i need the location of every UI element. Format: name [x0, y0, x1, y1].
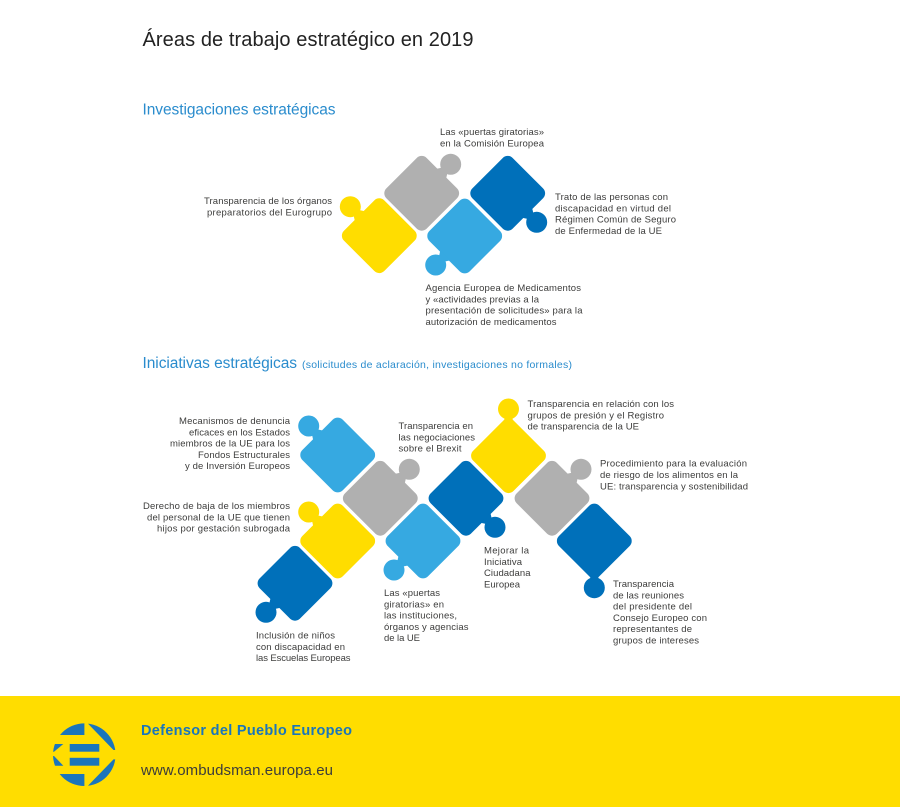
label: negociaciones Brexit: sobre el Brexit: [398, 444, 462, 455]
label: derecho de baja: hijos por gestación subrogada: [157, 524, 291, 535]
footer band: [0, 696, 900, 807]
label: trato de las personas: Trato de las personas con: [555, 192, 668, 203]
label: Agencia Europea de Medicamentos: Agencia Europea de Medicamentos: [426, 283, 581, 294]
icon: ombudsman logo: [53, 723, 116, 786]
puzzle piece: dark blue 2: [426, 458, 523, 555]
label: evaluación de riesgo: de riesgo de los alimentos en la: [600, 470, 739, 481]
label: Escuelas Europeas: las Escuelas Europeas: [256, 653, 351, 664]
label: puertas giratorias instituciones: [384, 588, 469, 644]
label: mecanismos de denuncia: y de Inversión Europeos: [185, 461, 290, 472]
puzzle piece: gray 1: [340, 442, 437, 539]
label: mecanismos de denuncia: miembros de la UE para los: [170, 439, 290, 450]
label: presidente del Consejo: Transparencia: [613, 579, 675, 590]
label: órganos preparatorios: preparatorios del Eurogrupo: [207, 207, 332, 218]
label: grupos de presión: Transparencia en relación con los: [528, 399, 674, 410]
puzzle piece: yellow 1: [281, 484, 378, 581]
puzzle piece: yellow: [323, 179, 420, 276]
label: evaluación de riesgo: [600, 459, 748, 492]
label: órganos preparatorios: Transparencia de los órganos: [204, 196, 332, 207]
puzzle piece: gray 2: [512, 442, 609, 539]
footer name: Defensor del Pueblo Europeo: [141, 723, 352, 739]
label: puertas giratorias instituciones: de la UE: [384, 633, 420, 644]
label: mecanismos de denuncia: [170, 416, 291, 472]
label: puertas giratorias Comisión: en la Comisión Europea: [440, 138, 545, 149]
label: puertas giratorias Comisión: [440, 127, 545, 149]
puzzle: iniciativas estratégicas: [238, 398, 635, 640]
label: negociaciones Brexit: [398, 421, 475, 455]
label: puertas giratorias Comisión: Las «puertas giratorias»: [440, 127, 544, 138]
footer url: www.ombudsman.europa.eu: [140, 762, 333, 779]
label: Escuelas Europeas: Inclusión de niños: [256, 630, 335, 642]
label: Iniciativa Ciudadana: Europea: [484, 579, 521, 590]
label: derecho de baja: [143, 501, 291, 535]
puzzle piece: yellow 2: [468, 398, 549, 496]
label: Iniciativa Ciudadana: [484, 546, 531, 590]
label: puertas giratorias instituciones: órganos y agencias: [384, 622, 469, 633]
label: órganos preparatorios: [204, 196, 332, 218]
label: Iniciativa Ciudadana: Mejorar la: [484, 546, 530, 556]
label: Agencia Europea de Medicamentos: presentación de solicitudes» para la: [426, 306, 583, 317]
label: Agencia Europea de Medicamentos: [426, 283, 583, 328]
label: presidente del Consejo: Consejo Europeo con: [613, 613, 707, 624]
label: Iniciativa Ciudadana: Ciudadana: [484, 568, 531, 579]
label: mecanismos de denuncia: eficaces en los Estados: [189, 427, 290, 438]
label: mecanismos de denuncia: Mecanismos de denuncia: [179, 416, 291, 427]
label: evaluación de riesgo: UE: transparencia y sostenibilidad: [600, 481, 748, 492]
label: grupos de presión: grupos de presión y el Registro: [528, 410, 664, 421]
puzzle piece: dark blue: [467, 153, 564, 250]
puzzle piece: dark blue 1: [238, 543, 335, 640]
label: presidente del Consejo: [613, 579, 707, 646]
label: negociaciones Brexit: Transparencia en: [398, 421, 473, 432]
label: mecanismos de denuncia: Fondos Estructurales: [198, 450, 290, 461]
label: puertas giratorias instituciones: giratorias» en: [384, 599, 444, 610]
title: Áreas de trabajo estratégico en 2019: [142, 28, 474, 51]
label: grupos de presión: [528, 399, 674, 433]
puzzle piece: light blue 2: [366, 501, 463, 598]
label: evaluación de riesgo: Procedimiento para la evaluación: [600, 459, 747, 470]
label: Agencia Europea de Medicamentos: autorización de medicamentos: [426, 317, 557, 328]
label: Iniciativa Ciudadana: Iniciativa: [484, 557, 523, 568]
label: derecho de baja: Derecho de baja de los miembros: [143, 501, 290, 512]
label: presidente del Consejo: del presidente del: [613, 602, 692, 613]
heading: Investigaciones estratégicas: Investigaciones estratégicas: [142, 101, 336, 118]
puzzle piece: light blue 1: [281, 398, 378, 495]
heading: Iniciativas estratégicas: [142, 355, 572, 372]
label: trato de las personas: Régimen Común de Seguro: [555, 215, 676, 226]
label: presidente del Consejo: representantes de: [613, 624, 692, 635]
label: puertas giratorias instituciones: Las «puertas: [384, 588, 440, 599]
label: Escuelas Europeas: [256, 630, 351, 664]
label: trato de las personas: discapacidad en virtud del: [555, 203, 671, 214]
puzzle piece: light blue: [408, 196, 505, 293]
label: negociaciones Brexit: las negociaciones: [398, 432, 475, 443]
label: derecho de baja: del personal de la UE que tienen: [147, 512, 290, 523]
label: trato de las personas: de Enfermedad de la UE: [555, 226, 662, 237]
heading: Iniciativas estratégicas: (solicitudes de aclaración, investigaciones no formales): [302, 359, 572, 371]
puzzle piece: dark blue 3: [554, 501, 635, 598]
puzzle piece: gray: [381, 137, 478, 234]
heading: Iniciativas estratégicas: Iniciativas estratégicas: [142, 355, 297, 372]
label: puertas giratorias instituciones: las instituciones,: [384, 611, 457, 622]
label: Escuelas Europeas: con discapacidad en: [256, 642, 345, 653]
label: trato de las personas: [555, 192, 676, 237]
label: presidente del Consejo: de las reuniones: [613, 590, 684, 601]
puzzle: investigaciones estratégicas: [323, 137, 564, 293]
label: presidente del Consejo: grupos de intereses: [613, 636, 699, 646]
label: Agencia Europea de Medicamentos: y «actividades previas a la: [426, 294, 540, 305]
label: grupos de presión: de transparencia de la UE: [528, 422, 639, 433]
